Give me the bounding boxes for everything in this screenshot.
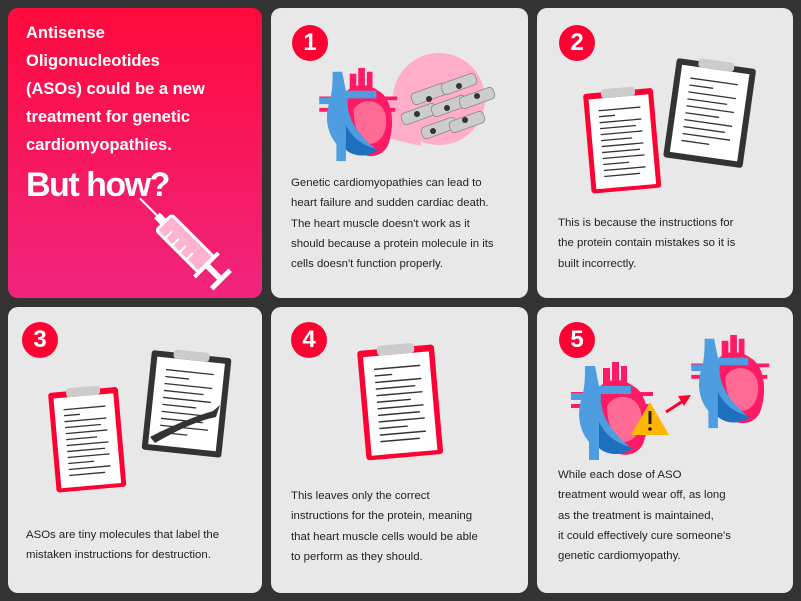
text: step 2 bbox=[558, 217, 735, 270]
text: step 3: mistaken instructions for destruction. bbox=[26, 549, 211, 561]
text: step 5 bbox=[558, 469, 731, 562]
title text: (ASOs) could be a new bbox=[26, 80, 205, 98]
text: step 1: The heart muscle doesn't work as it bbox=[291, 218, 470, 230]
illustration: clipboards with torn one bbox=[48, 350, 232, 492]
number 1 bbox=[292, 25, 328, 61]
number 1: 1 bbox=[303, 29, 317, 56]
panel: intro bbox=[8, 8, 262, 298]
panel: step 1 bbox=[271, 8, 528, 298]
text: step 3: ASOs are tiny molecules that label the bbox=[26, 529, 219, 541]
title text: Oligonucleotides bbox=[26, 52, 160, 70]
title text: cardiomyopathies. bbox=[26, 136, 172, 154]
text: step 4 bbox=[291, 490, 478, 563]
title text bbox=[26, 24, 205, 154]
title text: Antisense bbox=[26, 24, 105, 42]
text: step 1: should because a protein molecule in its bbox=[291, 238, 494, 250]
text: step 4: This leaves only the correct bbox=[291, 490, 430, 502]
text: step 2: the protein contain mistakes so it is bbox=[558, 237, 735, 249]
text: step 4: that heart muscle cells would be able bbox=[291, 531, 478, 543]
illustration: single clipboard bbox=[357, 343, 443, 460]
text: step 5: treatment would wear off, as long bbox=[558, 489, 726, 501]
panel: step 4 bbox=[271, 307, 528, 593]
text: step 1: cells doesn't function properly. bbox=[291, 258, 443, 270]
text: step 2: built incorrectly. bbox=[558, 258, 636, 270]
panel: step 5 bbox=[537, 307, 793, 593]
title text: treatment for genetic bbox=[26, 108, 190, 126]
text: step 1: Genetic cardiomyopathies can lead to bbox=[291, 177, 482, 189]
heading: But how?: But how? bbox=[26, 166, 169, 204]
text: step 1 bbox=[291, 177, 494, 270]
number 2: 2 bbox=[570, 29, 584, 56]
panel: step 3 bbox=[8, 307, 262, 593]
text: step 5: as the treatment is maintained, bbox=[558, 510, 714, 522]
illustration: heart with muscle cells bbox=[319, 53, 496, 162]
illustration: hearts with warning and arrow bbox=[571, 335, 770, 460]
text: step 1: heart failure and sudden cardiac death. bbox=[291, 197, 489, 209]
number 3: 3 bbox=[33, 326, 47, 353]
number 4 bbox=[291, 322, 327, 358]
text: step 4: instructions for the protein, meaning bbox=[291, 510, 472, 522]
number 5: 5 bbox=[570, 326, 584, 353]
text: step 3 bbox=[26, 529, 219, 561]
number 4: 4 bbox=[302, 326, 316, 353]
illustration: clipboards bbox=[583, 58, 756, 194]
number 3 bbox=[22, 322, 58, 358]
text: step 4: to perform as they should. bbox=[291, 551, 423, 563]
text: step 5: While each dose of ASO bbox=[558, 469, 681, 481]
text: step 5: genetic cardiomyopathy. bbox=[558, 550, 681, 562]
text: step 5: it could effectively cure someone's bbox=[558, 530, 731, 542]
number 5 bbox=[559, 322, 595, 358]
text: step 2: This is because the instructions for bbox=[558, 217, 733, 229]
icon: syringe bbox=[139, 198, 232, 290]
number 2 bbox=[559, 25, 595, 61]
panel: step 2 bbox=[537, 8, 793, 298]
